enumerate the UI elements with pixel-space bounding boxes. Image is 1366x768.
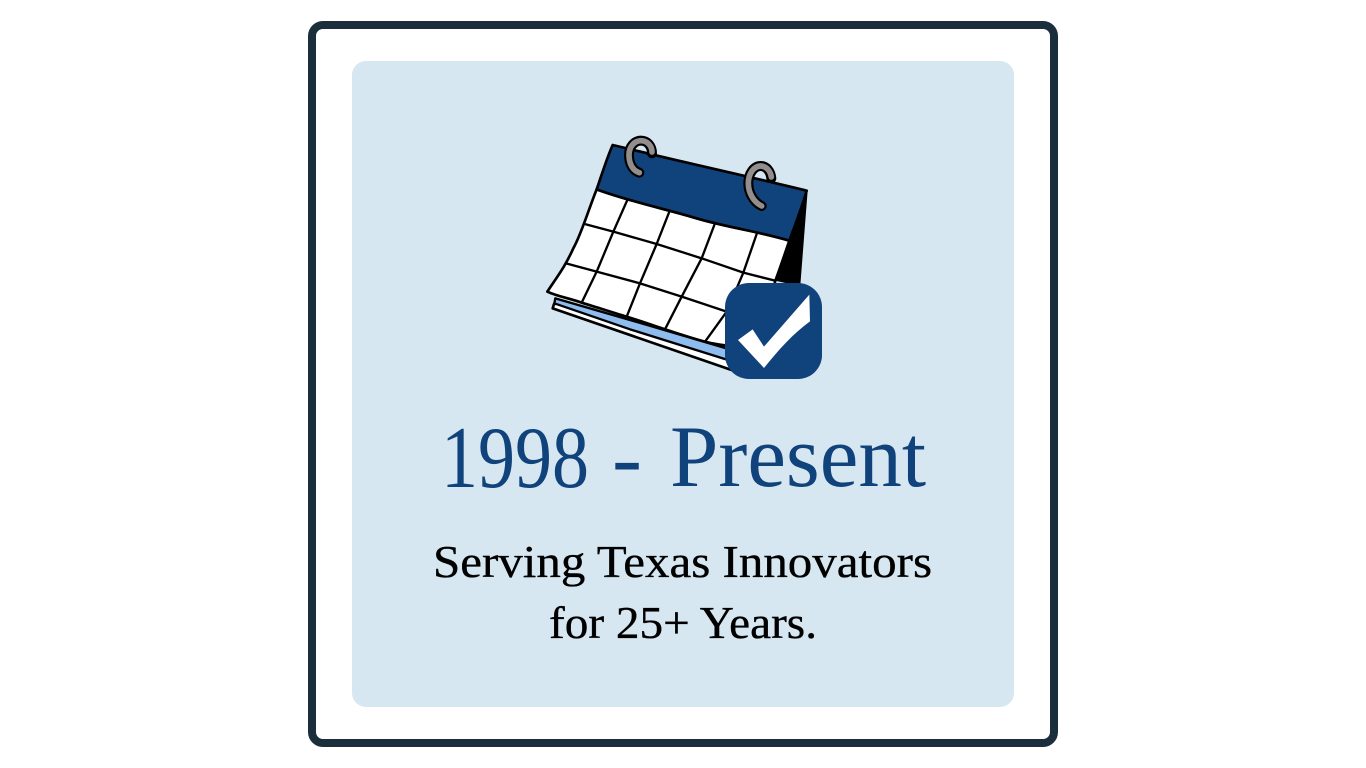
white date grid page [547, 189, 789, 350]
subtitle line two: for 25+ Years. [549, 597, 817, 648]
panel: light blue card [352, 61, 1014, 707]
heading word: Present [670, 409, 926, 506]
grid lines [566, 200, 775, 342]
left binder ring [629, 141, 652, 173]
white check mark [738, 295, 810, 368]
calendar blue header [597, 145, 807, 241]
blue sheet [554, 298, 743, 361]
heading [441, 409, 926, 507]
subtitle text [433, 536, 932, 648]
subtitle line one: Serving Texas Innovators [433, 536, 932, 587]
calendar back cover [777, 191, 807, 285]
right binder ring [748, 166, 771, 206]
outer frame [312, 25, 1054, 743]
heading years: 1998 [441, 410, 589, 507]
check badge [725, 283, 822, 379]
lower white sheet [553, 303, 743, 371]
heading dash: - [612, 410, 642, 507]
icon: calendar with check badge [547, 141, 822, 379]
